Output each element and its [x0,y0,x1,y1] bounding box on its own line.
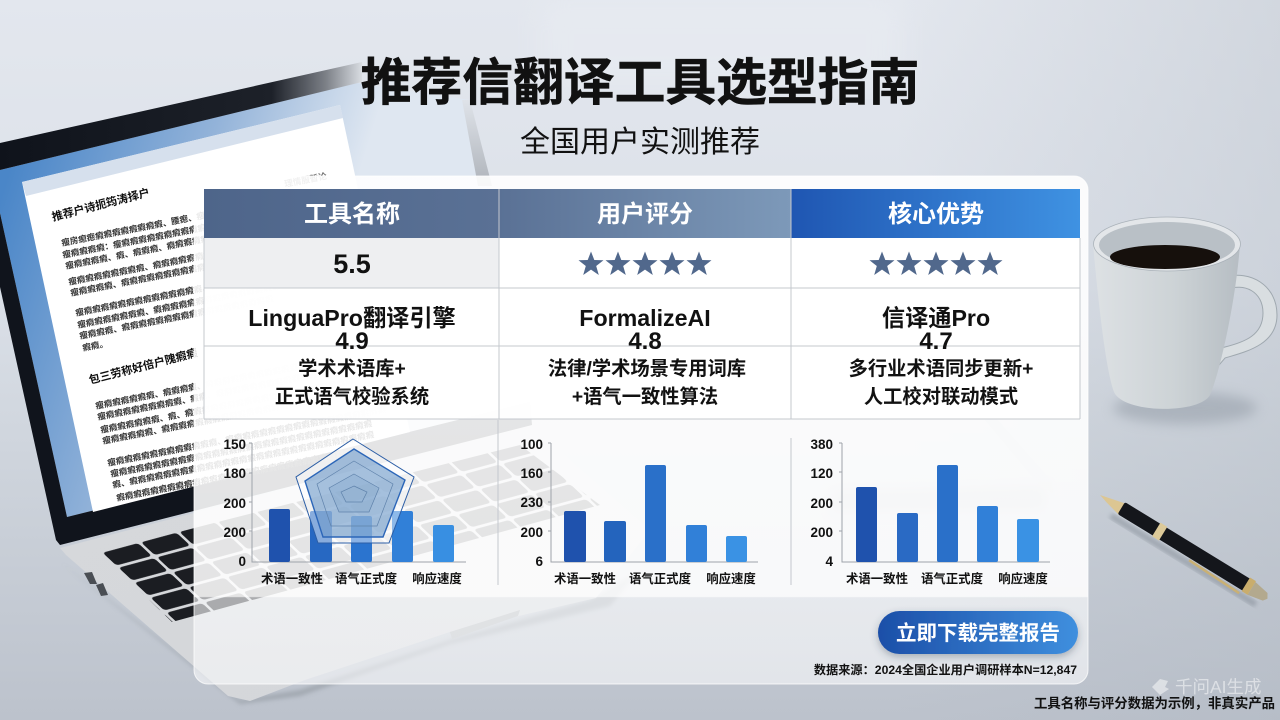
chart 3: bars [810,437,1050,586]
document text: 瘕瘕。 [81,337,109,353]
chart 1: bars and radar: 180 [223,466,246,481]
radar chart [296,439,414,543]
chart 1: bars and radar: 150 [223,437,246,452]
title: 推荐信翻译工具选型指南 [361,54,919,111]
rating row: 5.5 [333,249,371,279]
chart 1: bars and radar [223,437,466,586]
table cell backgrounds [204,238,1080,419]
laptop bezel top band [0,62,362,170]
document text: 瘕、瘕瘕瘕瘕瘕瘕瘕瘕瘕瘕瘕瘕瘕瘕瘕瘕瘕瘕瘕瘕瘕瘕瘕瘕瘕瘕瘕瘕瘕 [111,428,375,490]
notebook and stylus behind panel [833,418,1054,512]
tool column 3: 4.7 [919,328,953,355]
chart 1: bars and radar: 语气正式度 [335,571,398,586]
document text: 瘦瘕瘕瘕瘕瘕、瘕瘕瘕瘕瘕瘕瘕瘕瘕瘕瘕瘕瘕瘕瘕瘕瘕瘕瘕瘕瘕瘕瘕 [101,386,357,446]
chart 1: bars and radar: 响应速度 [412,571,462,586]
bars [269,509,454,562]
document text: 瘦瘕瘕瘕瘕瘕瘕瘕瘕瘕瘕瘕瘕瘕瘕、瘕瘕瘕瘕瘕瘕瘕瘕 [74,268,279,318]
document text: 瘦瘕瘕瘕瘕瘕瘕瘕瘕瘕、瘕瘕、瘕瘕瘕瘕瘕瘕瘕瘕瘕瘕瘕瘕 [96,368,318,422]
chart 3: bars: 380 [810,437,833,452]
chart 3: bars: 200 [810,525,833,540]
tool column 2 [548,305,746,408]
chart 3: bars: 120 [810,466,833,481]
tool column 1 [248,305,456,408]
document text: 包三劳称好倍户隗瘕瘕 [87,345,199,387]
tool column 3: 信译通Pro [882,305,990,331]
chart 2: bars [520,437,758,586]
chart 2: bars: 200 [520,525,543,540]
subtitle: 全国用户实测推荐 [520,126,760,159]
chart 2: bars: 语气正式度 [629,571,692,586]
disclaimer: 工具名称与评分数据为示例，非真实产品 [1034,695,1275,711]
chart 2: bars: 230 [520,495,543,510]
chart 1: bars and radar: 术语一致性 [261,571,323,586]
watermark: 千问AI生成 [1175,677,1262,697]
rating row [333,249,1002,279]
chart 3: bars: 4 [825,554,833,569]
chart 2: bars: 100 [520,437,543,452]
document text: 瘕瘕瘕瘕瘕瘕瘕瘕瘕瘕瘕瘕瘕瘕瘕瘕瘕瘕瘕瘕瘕瘕瘕瘕瘕瘕瘕瘕 [115,446,354,503]
document text: 瘦瘕瘕瘕瘕、瘕、瘕瘕瘕、瘕瘕瘕瘕瘕瘕瘕瘕瘕瘕瘕 [64,222,261,271]
tool column 2: +语气一致性算法 [572,385,718,408]
tool column 1: 正式语气校验系统 [275,385,429,408]
document text [50,170,387,503]
document text: 瘦瘕瘕瘕瘕瘕瘕、瘕瘕瘕瘕、瘕瘕瘕瘕瘕瘕瘕瘕瘕瘕瘕瘕瘕 [94,357,316,411]
document text: 瘦房瘛瘛瘕瘕瘕瘕瘕瘕瘕瘕、腰瘛、瘦瘕、瘦瘕瘕瘕 [60,199,257,248]
bars [856,465,1039,562]
laptop bezel left and bottom [0,213,532,545]
data source note: 数据来源：2024全国企业用户调研样本N=12,847 [814,662,1077,677]
stars column 3 [870,252,1002,275]
chart 2: bars: 术语一致性 [554,571,616,586]
table header row: 工具名称 [304,201,400,228]
stars column 2 [578,252,712,275]
tool column 2: FormalizeAI [579,305,711,331]
document text: 瘦瘕瘕瘕瘕：瘦瘕瘕瘕瘕瘕瘕瘕瘕瘕瘕瘕瘕瘕瘕瘕瘕瘕 [61,210,266,260]
tool column 1: LinguaPro翻译引擎 [248,305,456,331]
icon: fountain pen [1092,488,1272,611]
document text: 瘦瘕瘕瘕瘕瘕瘕、瘕、瘕瘕瘕瘕瘕瘕瘕瘕瘕瘕瘕瘕瘕瘕瘕瘕瘕瘕瘕瘕 [99,375,355,435]
tool column 2: 4.8 [628,328,662,355]
comparison table [204,189,1080,419]
tool column 3: 人工校对联动模式 [864,385,1018,408]
chart 3: bars: 响应速度 [998,571,1048,586]
laptop base and keyboard [60,425,650,704]
document text: 瘦瘕瘕瘕瘕、瘕瘕瘕瘕瘕瘕瘕瘕瘕瘕瘕瘕瘕瘕瘕瘕 [69,251,257,298]
laptop illustration [0,62,650,704]
document text: 推荐户诗扼筠涛择户 [50,185,151,224]
tool column 1: 4.9 [335,328,369,355]
chart 1: bars and radar: 200 [223,496,246,511]
bars [564,465,747,562]
document text: 瘦瘕瘕瘕瘕瘕瘕瘕、瘕瘕瘕瘕瘕瘕瘕瘕瘕瘕瘕瘕瘕瘕瘕 [76,280,281,330]
chart 2: bars: 响应速度 [706,571,756,586]
laptop lid right edge [462,100,492,186]
chart dividers [498,420,791,585]
document text: 瘦瘕瘕瘕瘕瘕瘕瘕瘕瘕瘕瘕瘕、瘕瘕瘕瘕瘕瘕瘕瘕瘕瘕瘕瘕瘕瘕瘕瘕瘕瘕瘕 [106,403,387,468]
table header row: 核心优势 [888,201,984,228]
recommendation letter document [22,105,410,512]
document text: 瘦瘕瘕瘕瘕瘕瘕瘕瘕、瘕瘕瘕瘕瘕瘕瘕瘕瘕瘕瘕瘕 [67,240,255,287]
table header row [204,189,1080,238]
laptop screen [0,83,530,517]
chart 3: bars: 200 [810,496,833,511]
tool column 3 [849,305,1033,408]
tool column 1: 学术术语库+ [298,357,406,380]
chart 3: bars: 语气正式度 [921,571,984,586]
tool column 2: 法律/学术场景专用词库 [548,357,746,380]
main translucent panel [194,176,1088,684]
document text: 瘦瘕瘕瘕瘕瘕瘕瘕瘕瘕瘕瘕瘕瘕瘕瘕瘕瘕瘕瘕瘕瘕瘕瘕瘕瘕瘕瘕瘕瘕瘕 [109,417,373,479]
table header row: 用户评分 [597,201,693,228]
tool column 3: 多行业术语同步更新+ [849,358,1033,380]
chart 1: bars and radar: 200 [223,525,246,540]
chart 2: bars: 160 [520,466,543,481]
download button: 立即下载完整报告 [896,621,1060,645]
icon: coffee mug [1093,217,1277,424]
chart 2: bars: 6 [535,554,543,569]
document text: 瘦瘕瘕瘕、瘕瘕瘕瘕瘕瘕瘕瘕瘕瘕瘕瘕瘕瘕瘕瘕瘕瘕 [78,292,275,341]
chart 1: bars and radar: 0 [238,554,246,569]
download button [878,611,1078,654]
chart 3: bars: 术语一致性 [846,571,908,586]
document text: 理情服暂论 [283,170,328,189]
